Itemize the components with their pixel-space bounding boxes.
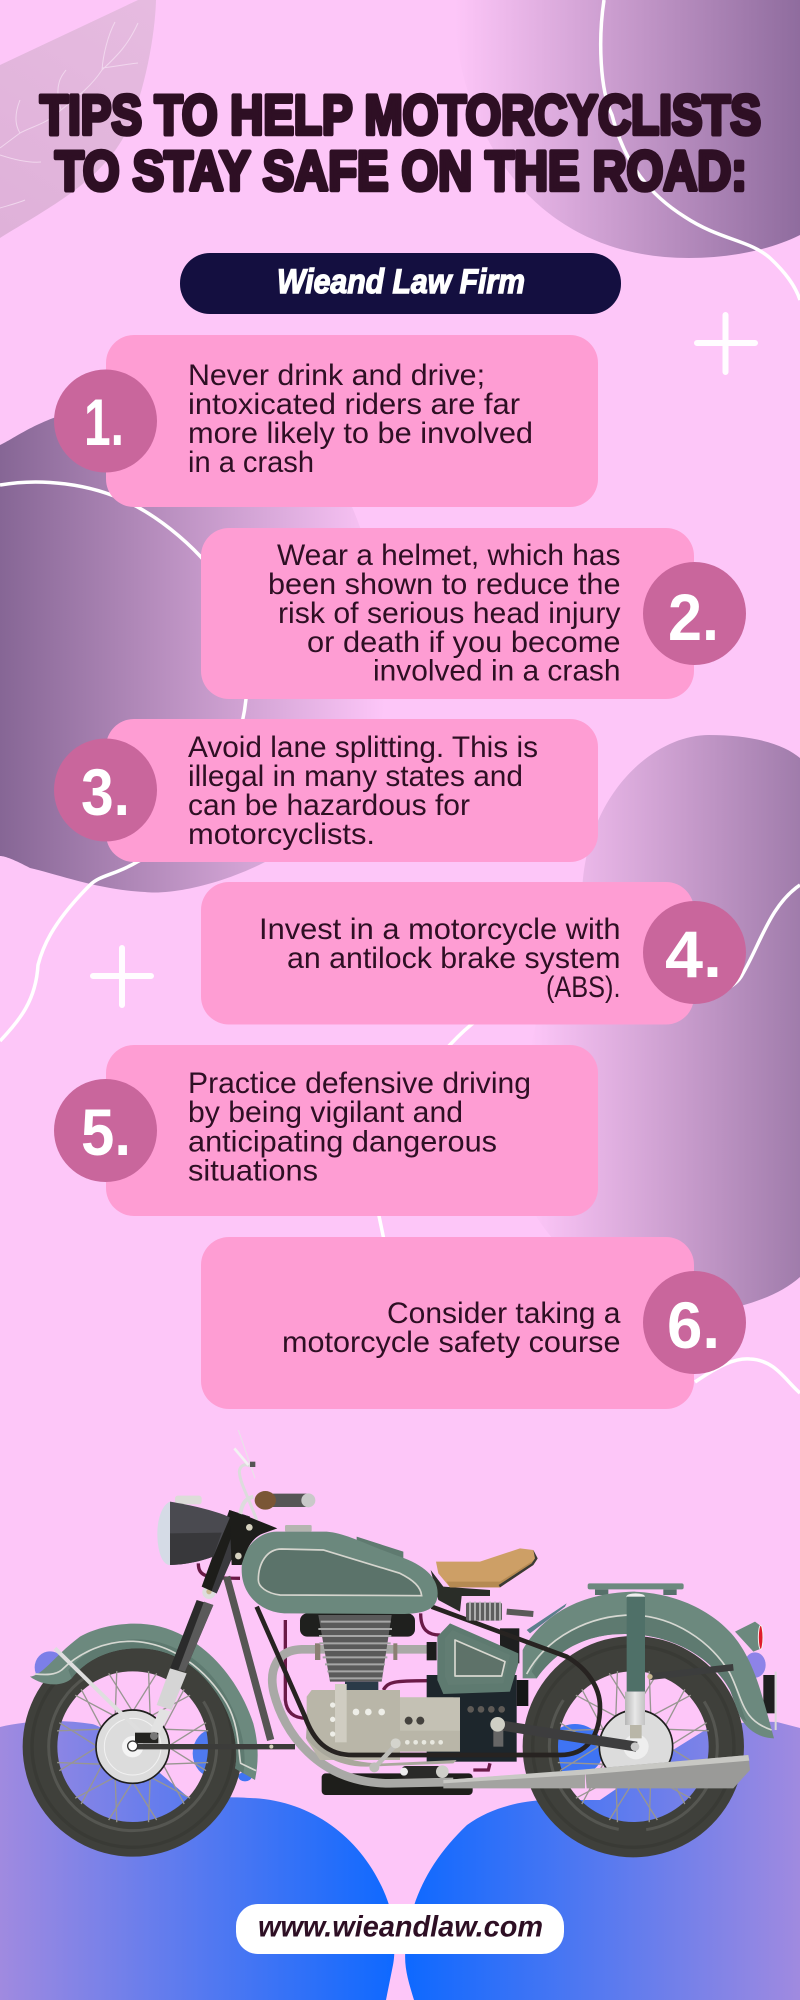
panel: tip 4 bbox=[201, 882, 746, 1024]
white curve top right bbox=[601, 0, 800, 300]
panel: tip 5: 5. bbox=[81, 1095, 131, 1169]
website pill bbox=[236, 1904, 564, 1954]
panel: tip 3 bbox=[54, 719, 598, 862]
rear wheel bbox=[523, 1636, 744, 1857]
decorative blob top right bbox=[455, 0, 800, 258]
rear swing arm bbox=[490, 1717, 639, 1751]
rear fender bbox=[523, 1583, 777, 1738]
panel: tip 2: been shown to reduce the bbox=[268, 568, 620, 601]
front swing arm and strut bbox=[55, 1648, 295, 1751]
decorative leaf top left bbox=[0, 0, 156, 238]
maroon hoses bbox=[198, 1563, 490, 1770]
panel: tip 1: more likely to be involved bbox=[188, 417, 533, 450]
fuel tank bbox=[242, 1525, 438, 1614]
kick lever bbox=[369, 1738, 401, 1772]
panel: tip 5: anticipating dangerous bbox=[188, 1126, 497, 1158]
panel: tip 6: Consider taking a bbox=[387, 1297, 621, 1330]
panel: tip 3: can be hazardous for bbox=[188, 789, 470, 822]
panel: tip 2: or death if you become bbox=[307, 626, 620, 659]
cylinder bbox=[315, 1615, 437, 1690]
panel: tip 3: illegal in many states and bbox=[188, 760, 523, 793]
panel: tip 5 bbox=[54, 1045, 598, 1216]
panel: tip 1: in a crash bbox=[188, 446, 314, 479]
panel: tip 3: motorcyclists. bbox=[188, 818, 375, 851]
panel: tip 3: 3. bbox=[81, 755, 130, 829]
panel: tip 4: an antilock brake system bbox=[287, 942, 620, 975]
panel: tip 1: Never drink and drive; bbox=[188, 359, 485, 392]
panel: tip 2: Wear a helmet, which has bbox=[277, 539, 620, 572]
motorcycle illustration bbox=[23, 1430, 777, 1857]
panel: tip 1 bbox=[54, 335, 598, 507]
bottom blob left bbox=[0, 1721, 394, 2000]
panel: tip 2: involved in a crash bbox=[373, 654, 620, 688]
bottom blob right bbox=[405, 1722, 800, 2000]
front fender bbox=[30, 1624, 258, 1780]
under seat bracket bbox=[431, 1570, 490, 1612]
handlebar and levers bbox=[229, 1430, 315, 1565]
panel: tip 1: intoxicated riders are far bbox=[188, 388, 520, 421]
crankcase bbox=[306, 1684, 460, 1767]
website pill: www.wieandlaw.com bbox=[258, 1910, 543, 1944]
plus icon top right bbox=[697, 315, 755, 372]
footpeg bbox=[400, 1765, 449, 1778]
firm name pill bbox=[180, 253, 621, 314]
panel: tip 1: 1. bbox=[84, 385, 124, 459]
panel: tip 6: 6. bbox=[667, 1288, 720, 1362]
panel: tip 5: Practice defensive driving bbox=[188, 1067, 531, 1100]
white curve left bbox=[0, 482, 249, 1041]
panel: tip 3: Avoid lane splitting. This is bbox=[188, 731, 538, 764]
decorative blob left bbox=[0, 408, 387, 893]
front fork bbox=[151, 1510, 250, 1733]
title bbox=[40, 83, 761, 202]
frame tube down bbox=[227, 1577, 271, 1740]
background bumps behind bike bbox=[35, 1651, 766, 1781]
white curve right bbox=[378, 885, 800, 1393]
panel: tip 6: motorcycle safety course bbox=[282, 1326, 620, 1359]
panel: tip 5: by being vigilant and bbox=[188, 1096, 463, 1129]
exhaust muffler bbox=[443, 1755, 750, 1788]
decorative blob right bbox=[526, 735, 800, 1313]
panel: tip 2: 2. bbox=[668, 580, 719, 654]
rear shock and struts bbox=[625, 1593, 733, 1738]
firm name pill: Wieand Law Firm bbox=[277, 263, 525, 301]
plus icon left bbox=[93, 948, 151, 1005]
spring and connector bbox=[466, 1602, 533, 1621]
panel: tip 5: situations bbox=[188, 1154, 318, 1188]
panel: tip 4: 4. bbox=[665, 917, 722, 991]
panel: tip 2 bbox=[201, 528, 746, 699]
panel: tip 4: Invest in a motorcycle with bbox=[259, 913, 620, 946]
main frame bbox=[257, 1607, 600, 1755]
headlight bbox=[157, 1496, 230, 1565]
panel: tip 2: risk of serious head injury bbox=[278, 597, 620, 630]
side panel bbox=[437, 1623, 518, 1694]
panel: tip 4: (ABS). bbox=[546, 971, 620, 1004]
front wheel bbox=[23, 1637, 243, 1857]
seat bbox=[436, 1548, 538, 1587]
dark engine blocks bbox=[300, 1613, 528, 1795]
panel: tip 6 bbox=[201, 1237, 746, 1409]
exhaust header pipe bbox=[272, 1649, 453, 1783]
